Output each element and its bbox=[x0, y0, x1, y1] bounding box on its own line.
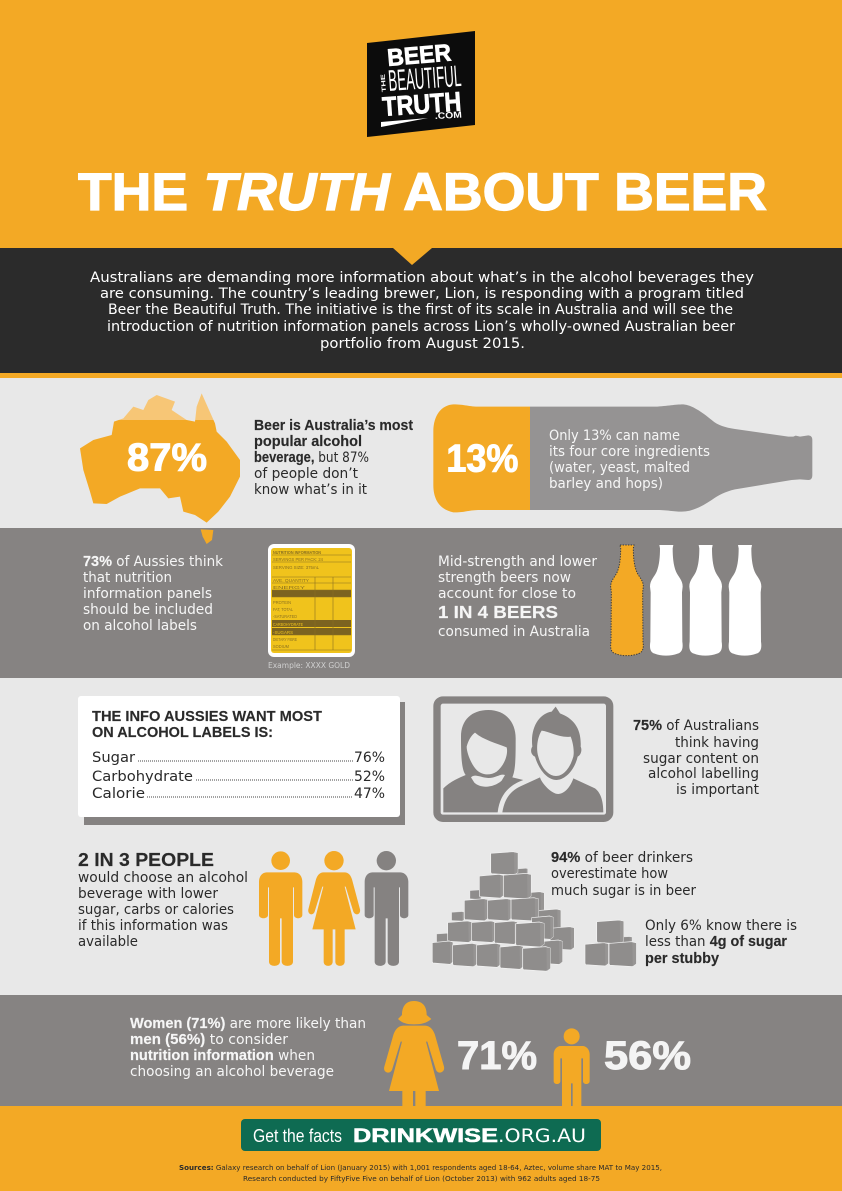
text: 2 in 3 people: available bbox=[78, 934, 138, 950]
logo: Beer the Beautiful Truth: BEAUTIFUL bbox=[387, 60, 462, 98]
icon: man grey bbox=[365, 851, 408, 966]
text: women more likely bbox=[130, 1015, 366, 1080]
nutrition label example: CARBOHYDRATE bbox=[273, 622, 303, 627]
text: beer popularity: popular alcohol bbox=[254, 433, 362, 450]
text: 75% of Australians: sugar content on bbox=[643, 751, 759, 767]
text: 1 in 4 beers: Mid-strength and lower bbox=[438, 554, 597, 570]
label caption: Example: XXXX GOLD bbox=[268, 661, 350, 670]
nutrition label example: -SATURATED bbox=[273, 614, 298, 619]
nutrition label example: PROTEIN bbox=[273, 600, 291, 605]
71% figure: 71% bbox=[457, 1034, 537, 1078]
intro text: introduction of nutrition information panels across Lion’s wholly-owned Australian beer bbox=[107, 319, 735, 335]
text: 94% overestimate bbox=[551, 849, 696, 899]
portrait icon: woman and man bbox=[437, 700, 610, 818]
logo: Beer the Beautiful Truth: BEER bbox=[386, 40, 452, 72]
text: beer popularity: Beer is Australia’s most bbox=[254, 417, 413, 434]
info box: what Aussies want: 76% bbox=[354, 750, 385, 766]
nutrition label example: DIETARY FIBRE bbox=[273, 637, 297, 642]
sugar cube pyramid bbox=[432, 852, 574, 971]
light panel 3 background bbox=[0, 678, 842, 995]
intro text: Australians are demanding more information about what’s in the alcohol beverages they bbox=[90, 270, 754, 286]
text: 1 in 4 beers: account for close to bbox=[438, 586, 576, 602]
icon: woman 71% bbox=[384, 1001, 444, 1107]
56% figure: 56% bbox=[604, 1034, 691, 1078]
text: 2 in 3 people: if this information was bbox=[78, 918, 228, 934]
text: 75% of Australians: 75% of Australians bbox=[633, 717, 759, 734]
intro text: Beer the Beautiful Truth. The initiative is the first of its scale in Australia and will see the bbox=[108, 302, 733, 318]
logo: Beer the Beautiful Truth: .COM bbox=[435, 110, 462, 121]
sources bbox=[179, 1163, 662, 1183]
info box: what Aussies want: Sugar bbox=[92, 750, 135, 766]
text: 75% of Australians: is important bbox=[676, 782, 759, 798]
info box: what Aussies want: 47% bbox=[354, 786, 385, 802]
text: 73% of Aussies: that nutrition bbox=[83, 570, 172, 586]
nutrition label example: ENERGY bbox=[273, 585, 305, 590]
info box: what Aussies want: ON ALCOHOL LABELS IS: bbox=[92, 725, 273, 741]
people icons: two in three bbox=[259, 851, 408, 966]
text: 1 in 4 beers bbox=[438, 554, 597, 640]
nutrition label example: SERVING SIZE: 375mL bbox=[273, 565, 319, 570]
text: 94% overestimate: 94% of beer drinkers bbox=[551, 849, 693, 866]
light panel 1 background bbox=[0, 378, 842, 528]
nutrition label example bbox=[268, 544, 355, 657]
text: 73% of Aussies: should be included bbox=[83, 602, 213, 618]
text: women more likely: Women (71%) are more likely than bbox=[130, 1015, 366, 1032]
text: four core ingredients: Only 13% can name bbox=[549, 428, 680, 444]
header background bbox=[0, 0, 842, 248]
sources: Research conducted by FiftyFive Five on behalf of Lion (October 2013) with 962 adults aged 18-75 bbox=[243, 1174, 600, 1183]
grey panel 2 background bbox=[0, 528, 842, 678]
text: 1 in 4 beers: strength beers now bbox=[438, 570, 571, 586]
text: beer popularity: know what’s in it bbox=[254, 482, 367, 498]
text: only 6% know: Only 6% know there is bbox=[645, 918, 797, 934]
text: 2 in 3 people: would choose an alcohol bbox=[78, 870, 248, 886]
info box: what Aussies want bbox=[78, 696, 405, 825]
text: 75% of Australians: think having bbox=[675, 735, 759, 751]
text: women more likely: men (56%) to consider bbox=[130, 1031, 288, 1048]
intro text: are consuming. The country’s leading brewer, Lion, is responding with a program titled bbox=[100, 286, 744, 302]
text: four core ingredients bbox=[549, 428, 710, 492]
icon: man orange bbox=[259, 851, 302, 966]
orange divider band bbox=[0, 373, 842, 378]
intro panel background bbox=[0, 248, 842, 373]
text: four core ingredients: its four core ingredients bbox=[549, 444, 710, 460]
info box: what Aussies want: 52% bbox=[354, 769, 385, 785]
intro text: portfolio from August 2015. bbox=[320, 336, 525, 352]
logo: Beer the Beautiful Truth bbox=[367, 31, 475, 137]
sources: Sources: Galaxy research on behalf of Lion (January 2015) with 1,001 respondents aged 18-64, Aztec, volume share MAT to May 2015, bbox=[179, 1163, 662, 1172]
text: 2 in 3 people: 2 IN 3 PEOPLE bbox=[78, 849, 214, 870]
bottle graphic, 13%: 13% bbox=[446, 437, 518, 480]
bottle graphic, 13% bbox=[433, 404, 812, 512]
Drinkwise banner: DRINKWISE bbox=[353, 1126, 498, 1147]
text: women more likely: choosing an alcohol beverage bbox=[130, 1064, 334, 1080]
text: 73% of Aussies: information panels bbox=[83, 586, 212, 602]
text: 73% of Aussies: on alcohol labels bbox=[83, 618, 197, 634]
text: 94% overestimate: much sugar is in beer bbox=[551, 883, 696, 899]
map of Australia, 87% bbox=[80, 393, 240, 544]
info box: what Aussies want: Calorie bbox=[92, 786, 145, 802]
nutrition label example: SERVINGS PER PACK: 24 bbox=[273, 557, 323, 562]
four bottles icon bbox=[611, 545, 761, 656]
small sugar cube stack bbox=[585, 920, 636, 967]
info box: what Aussies want: THE INFO AUSSIES WANT MOST bbox=[92, 709, 322, 725]
nutrition label example: -SUGARS bbox=[273, 630, 293, 635]
text: women more likely: nutrition information when bbox=[130, 1047, 315, 1064]
text: 73% of Aussies: 73% of Aussies think bbox=[83, 553, 224, 570]
text: four core ingredients: (water, yeast, malted bbox=[549, 460, 690, 476]
header notch arrow bbox=[393, 248, 432, 265]
logo: Beer the Beautiful Truth: TRUTH bbox=[381, 87, 462, 122]
text: 75% of Australians: alcohol labelling bbox=[648, 766, 759, 782]
map of Australia, 87%: 87% bbox=[127, 437, 207, 480]
text: four core ingredients: barley and hops) bbox=[549, 476, 663, 492]
nutrition label example: FAT, TOTAL bbox=[273, 607, 293, 612]
icon: man 56% bbox=[554, 1028, 590, 1107]
Drinkwise banner bbox=[241, 1119, 601, 1151]
nutrition label example: AVE. QUANTITY bbox=[273, 578, 309, 583]
text: 75% of Australians bbox=[633, 717, 759, 798]
text: only 6% know: per stubby bbox=[645, 950, 720, 967]
logo: Beer the Beautiful Truth: THE bbox=[381, 74, 388, 92]
icon: woman orange bbox=[308, 851, 360, 966]
intro text bbox=[90, 270, 754, 352]
nutrition label example: SODIUM bbox=[273, 644, 289, 649]
text: 1 in 4 beers: consumed in Australia bbox=[438, 624, 590, 640]
title: THE TRUTH ABOUT BEER bbox=[78, 163, 767, 222]
text: 73% of Aussies bbox=[83, 553, 224, 634]
text: beer popularity bbox=[254, 417, 413, 498]
nutrition label example: NUTRITION INFORMATION bbox=[273, 550, 322, 555]
text: 94% overestimate: overestimate how bbox=[551, 866, 668, 882]
text: only 6% know bbox=[645, 918, 797, 967]
text: beer popularity: of people don’t bbox=[254, 466, 358, 482]
text: 2 in 3 people: beverage with lower bbox=[78, 886, 218, 902]
text: 2 in 3 people: sugar, carbs or calories bbox=[78, 902, 234, 918]
Drinkwise banner: Get the facts bbox=[253, 1126, 342, 1146]
text: 2 in 3 people bbox=[78, 849, 248, 950]
info box: what Aussies want: Carbohydrate bbox=[92, 769, 193, 785]
text: only 6% know: less than 4g of sugar bbox=[645, 933, 787, 950]
text: beer popularity: beverage, but 87% bbox=[254, 449, 369, 466]
grey panel 4 background bbox=[0, 995, 842, 1106]
text: 1 in 4 beers: 1 IN 4 BEERS bbox=[438, 602, 558, 622]
footer background bbox=[0, 1106, 842, 1191]
Drinkwise banner: .ORG.AU bbox=[498, 1126, 586, 1147]
